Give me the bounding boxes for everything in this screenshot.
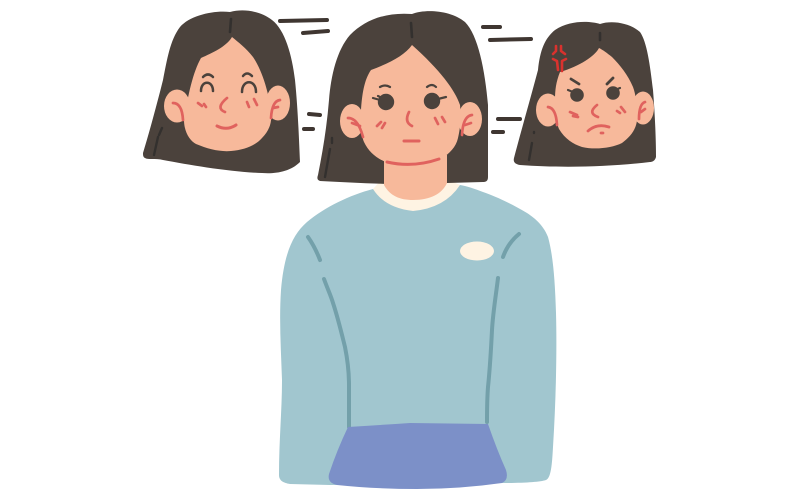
angry brows and lashes	[568, 78, 620, 92]
ears	[536, 92, 654, 126]
hair	[143, 10, 300, 173]
hair	[514, 22, 656, 167]
neck	[384, 155, 447, 200]
ears	[164, 86, 290, 122]
face	[555, 48, 637, 148]
eyes	[378, 93, 440, 110]
panel: right angry head	[514, 22, 656, 167]
hair strands	[529, 132, 534, 160]
hair part	[230, 19, 231, 32]
face lines	[173, 98, 280, 128]
ears	[340, 102, 482, 138]
face	[184, 37, 271, 151]
sweater body	[279, 185, 556, 485]
hair	[317, 11, 488, 184]
motion lines	[280, 20, 531, 132]
hair strands	[325, 138, 332, 177]
sweater seams	[308, 234, 519, 427]
face lines	[548, 102, 645, 133]
name badge	[460, 242, 494, 260]
sweater collar	[373, 176, 460, 211]
face lines	[348, 112, 472, 164]
eyes	[570, 86, 620, 102]
panel: center neutral head	[317, 11, 488, 200]
anger mark	[553, 46, 566, 71]
smiling eyes and brows	[201, 74, 256, 92]
face	[361, 45, 461, 166]
panel: sweater figure	[279, 176, 556, 489]
lashes and brows	[373, 85, 446, 100]
hair strands	[154, 128, 162, 155]
panel: left happy head	[143, 10, 300, 173]
hair part	[411, 23, 412, 37]
sweater pocket	[329, 423, 507, 489]
hair part	[599, 33, 601, 40]
